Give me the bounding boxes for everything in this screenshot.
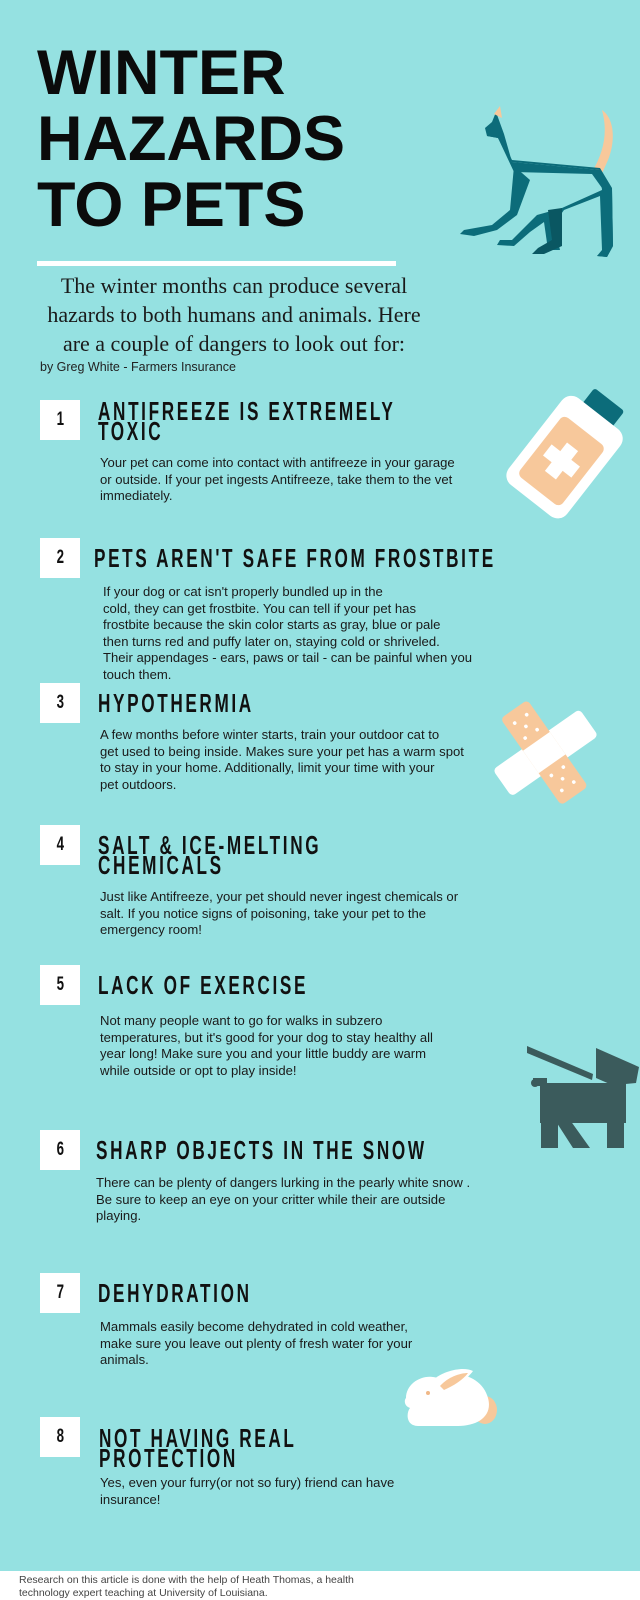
divider: [37, 261, 396, 266]
number 4: 4: [56, 834, 64, 855]
footer text: Research on this article is done with the help of Heath Thomas, a health: [19, 1574, 354, 1586]
body 2: If your dog or cat isn't properly bundled up in the: [103, 584, 383, 599]
heading 6: SHARP OBJECTS IN THE SNOW: [96, 1135, 427, 1165]
icon: bunny: [404, 1369, 497, 1426]
heading 4: [98, 830, 321, 880]
body 7: Mammals easily become dehydrated in cold weather,: [100, 1319, 408, 1334]
footer text: technology expert teaching at University of Louisiana.: [19, 1587, 268, 1599]
body 7: make sure you leave out plenty of fresh water for your: [100, 1336, 412, 1350]
number 3: 3: [56, 692, 64, 713]
body 5: Not many people want to go for walks in subzero: [100, 1013, 382, 1028]
body 3: to stay in your home. Additionally, limit your time with your: [100, 760, 435, 775]
number 1: 1: [56, 409, 64, 430]
title: TO PETS: [37, 170, 305, 240]
heading 4: SALT & ICE-MELTING: [98, 830, 321, 860]
body 3: pet outdoors.: [100, 776, 176, 792]
body 6: There can be plenty of dangers lurking in the pearly white snow .: [96, 1175, 470, 1190]
body 4: [100, 889, 458, 937]
body 5: [100, 1013, 433, 1078]
body 3: A few months before winter starts, train your outdoor cat to: [100, 727, 439, 742]
body 2: cold, they can get frostbite. You can tell if your pet has: [103, 600, 416, 616]
section 1: [40, 396, 455, 503]
heading 1: ANTIFREEZE IS EXTREMELY: [98, 396, 396, 426]
body 4: Just like Antifreeze, your pet should never ingest chemicals or: [100, 889, 458, 904]
body 8: Yes, even your furry(or not so fury) friend can have: [100, 1475, 394, 1490]
heading 7: DEHYDRATION: [98, 1278, 252, 1308]
body 2: Their appendages - ears, paws or tail - can be painful when you: [103, 650, 472, 665]
footer: [0, 1571, 640, 1600]
number 6: 6: [56, 1139, 64, 1160]
section 5: [40, 965, 433, 1078]
number 7: [40, 1273, 80, 1313]
number 2: [40, 538, 80, 578]
number 5: [40, 965, 80, 1005]
body 5: temperatures, but it's good for your dog to stay healthy all: [100, 1030, 433, 1044]
icon: medicine bottle: [506, 389, 624, 518]
number 1: [40, 400, 80, 440]
heading 3: HYPOTHERMIA: [98, 688, 254, 718]
body 1: [100, 455, 455, 503]
intro text: The winter months can produce several: [61, 273, 407, 298]
heading 2: PETS AREN'T SAFE FROM FROSTBITE: [94, 543, 496, 573]
body 3: get used to being inside. Makes sure your pet has a warm spot: [100, 744, 464, 758]
body 6: Be sure to keep an eye on your critter while their are outside: [96, 1192, 445, 1206]
body 4: salt. If you notice signs of poisoning, take your pet to the: [100, 906, 426, 920]
body 8: insurance!: [100, 1492, 160, 1506]
heading 1: [98, 396, 396, 446]
heading 4: CHEMICALS: [98, 850, 224, 880]
icon: bandage: [494, 702, 596, 804]
body 6: playing.: [96, 1208, 141, 1223]
body 6: [96, 1175, 470, 1223]
body 5: while outside or opt to play inside!: [100, 1062, 297, 1078]
title: WINTER: [37, 38, 285, 108]
number 5: 5: [56, 974, 64, 995]
number 4: [40, 825, 80, 865]
body 4: emergency room!: [100, 922, 202, 937]
title: HAZARDS: [37, 104, 345, 174]
body 2: [103, 584, 472, 682]
heading 8: [99, 1423, 297, 1473]
footer text: [19, 1574, 354, 1599]
title: [37, 38, 345, 240]
number 7: 7: [56, 1282, 64, 1303]
section 2: [40, 538, 496, 682]
body 1: Your pet can come into contact with antifreeze in your garage: [100, 455, 455, 470]
body 2: then turns red and puffy later on, staying cold or shriveled.: [103, 634, 440, 648]
icon: cat: [460, 106, 613, 257]
section 7: [40, 1273, 412, 1367]
body 1: immediately.: [100, 488, 173, 503]
number 6: [40, 1130, 80, 1170]
section 3: [40, 683, 464, 792]
intro text: hazards to both humans and animals. Here: [47, 302, 421, 327]
body 5: year long! Make sure you and your little buddy are warm: [100, 1046, 426, 1061]
number 8: 8: [56, 1426, 64, 1447]
section 6: [40, 1130, 470, 1223]
number 2: 2: [56, 547, 64, 568]
body 7: [100, 1319, 412, 1367]
number 3: [40, 683, 80, 723]
heading 8: PROTECTION: [99, 1443, 238, 1473]
heading 5: LACK OF EXERCISE: [98, 970, 308, 1000]
intro text: are a couple of dangers to look out for:: [63, 331, 405, 356]
body 2: frostbite because the skin color starts as gray, blue or pale: [103, 617, 440, 632]
body 3: [100, 727, 464, 792]
intro text: [47, 273, 421, 356]
body 1: or outside. If your pet ingests Antifreeze, take them to the vet: [100, 472, 452, 486]
body 2: touch them.: [103, 666, 171, 682]
heading 8: NOT HAVING REAL: [99, 1423, 297, 1453]
icon: dog on leash: [527, 1046, 639, 1148]
section 4: [40, 825, 458, 937]
number 8: [40, 1417, 80, 1457]
body 7: animals.: [100, 1352, 149, 1367]
byline: by Greg White - Farmers Insurance: [40, 360, 236, 374]
section 8: [40, 1417, 394, 1506]
body 8: [100, 1475, 394, 1506]
heading 1: TOXIC: [98, 416, 163, 446]
